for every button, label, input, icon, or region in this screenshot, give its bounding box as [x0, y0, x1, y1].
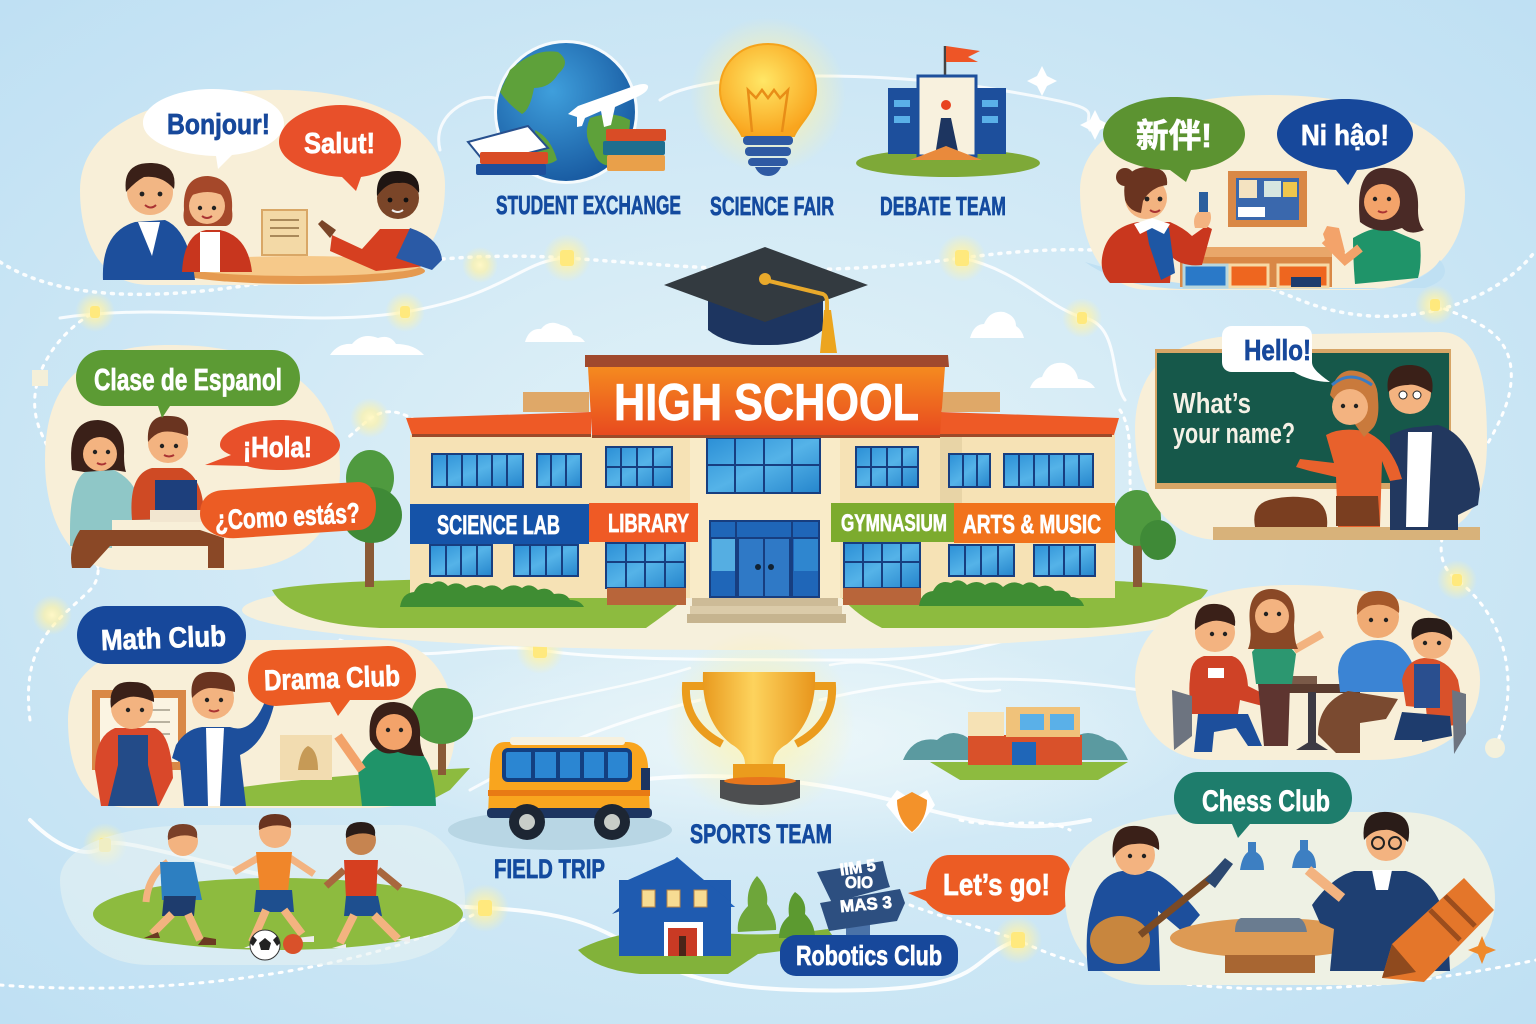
panel background	[60, 825, 465, 965]
pill: Robotics Club: Robotics Club	[796, 940, 942, 971]
banner: Arts & Music	[954, 503, 1115, 543]
trophy handles	[686, 686, 832, 744]
books right	[603, 129, 666, 171]
banner: Gymnasium: GYMNASIUM	[841, 510, 947, 537]
speech bubble: Hello	[1222, 326, 1330, 382]
speech bubble: Let's go: Let’s go!	[943, 867, 1050, 902]
books left	[468, 126, 548, 175]
brick planters	[607, 588, 921, 605]
pale light band below the school	[360, 630, 1200, 850]
bus stripes and bumper	[487, 768, 652, 818]
speech bubble: green greeting: 新伴!	[1136, 117, 1212, 154]
person: woman with guitar	[1087, 826, 1233, 971]
ground and lawn	[242, 570, 1218, 650]
speech bubble: Ni hao	[1277, 99, 1413, 185]
icon: orange shield	[886, 790, 935, 833]
ground	[856, 149, 1040, 177]
school name sign: HIGH SCHOOL	[614, 374, 919, 432]
pill: Math Club	[77, 606, 246, 664]
speech bubble: Bonjour	[143, 89, 284, 169]
bus wheels	[509, 804, 630, 840]
illustration: blue house	[578, 856, 958, 976]
player: center	[234, 814, 314, 948]
table with board	[1170, 918, 1370, 973]
upper windows	[432, 438, 1093, 493]
tree	[411, 688, 473, 775]
person: man in blue jacket	[103, 163, 195, 280]
label: Debate Team: DEBATE TEAM	[880, 191, 1006, 221]
label: Sports Team: SPORTS TEAM	[690, 819, 832, 849]
illustration: small school	[903, 707, 1128, 780]
table with document	[175, 210, 425, 284]
panel: Bonjour conversation	[80, 89, 445, 285]
soccer ball	[250, 930, 280, 960]
bus windows	[504, 750, 630, 780]
whiteboard	[92, 690, 186, 770]
entrance steps	[687, 598, 846, 623]
panel background	[45, 345, 340, 570]
pill: Clase de Espanol	[76, 350, 300, 418]
trophy base	[720, 764, 800, 805]
speech bubble: Let's go	[908, 855, 1072, 915]
bulletin board	[1228, 171, 1307, 227]
speech bubble: Drama Club: Drama Club	[263, 661, 400, 697]
player: right	[326, 822, 410, 948]
desk	[71, 510, 224, 568]
signpost: IIM 5	[839, 856, 877, 879]
label: Student Exchange: STUDENT EXCHANGE	[496, 190, 681, 220]
chalk text: What's: What’s	[1173, 388, 1251, 420]
icon: graduation cap	[664, 247, 868, 353]
speech bubble: Salut	[279, 105, 401, 191]
person: teacher with glasses	[1308, 812, 1450, 971]
trophy glow	[665, 630, 855, 820]
label: Field Trip: FIELD TRIP	[494, 854, 605, 884]
clouds	[330, 312, 1095, 388]
person: teacher in blue jacket	[172, 672, 274, 806]
signpost: OIO	[845, 873, 873, 892]
person: woman in green	[1323, 168, 1424, 284]
panel: chess club	[1065, 772, 1496, 985]
panel background	[80, 90, 445, 285]
blackboard	[1155, 349, 1451, 489]
speech bubble: Salut: Salut!	[304, 128, 375, 160]
tree left	[342, 450, 402, 587]
bells	[1240, 840, 1316, 870]
panel background	[68, 640, 455, 808]
green field	[93, 878, 463, 950]
person: woman teacher	[1296, 370, 1402, 527]
pill: Robotics Club	[780, 935, 958, 976]
trophy cup	[703, 672, 815, 764]
banner: Gymnasium	[831, 503, 954, 542]
pill: Clase de Espanol: Clase de Espanol	[94, 362, 282, 397]
desk and bag	[1213, 497, 1480, 540]
roofs	[406, 412, 1119, 437]
person: man in blue	[1318, 591, 1416, 753]
chalk text: your name: your name?	[1173, 418, 1295, 450]
speech bubble: Drama Club	[248, 646, 416, 716]
person: man in navy jacket	[1388, 365, 1480, 530]
trees	[738, 876, 815, 938]
speech bubble: Hola	[205, 420, 340, 470]
rear blocks	[523, 392, 1000, 412]
person: woman in green	[338, 702, 436, 806]
walls	[410, 435, 1115, 598]
panel background	[1065, 812, 1495, 985]
bulb glow	[690, 17, 846, 173]
signpost	[817, 856, 905, 937]
school name sign	[585, 355, 949, 438]
cabinet	[1180, 247, 1332, 287]
mortarboard	[664, 247, 868, 322]
cap skull	[708, 298, 823, 345]
speech bubble: Como estas: ¿Como estás?	[214, 497, 361, 536]
shrubs and lawn	[903, 733, 1128, 780]
icon: globe with plane and books	[468, 40, 666, 184]
person: woman in red jacket	[182, 176, 252, 272]
speech bubble: Chess Club: Chess Club	[1202, 785, 1330, 818]
banner: Science Lab	[410, 504, 589, 544]
pill: Math Club: Math Club	[100, 621, 226, 657]
person: boy in overalls	[95, 682, 173, 806]
person: woman in teal	[70, 420, 160, 548]
bus shadow	[448, 810, 672, 850]
person: boy in red	[1172, 604, 1276, 752]
icon: crayon	[1382, 878, 1494, 982]
bulb base	[743, 136, 793, 176]
flag	[945, 46, 980, 78]
lower windows	[430, 543, 1095, 588]
speech bubble: Como estas	[200, 482, 376, 538]
speech bubble: Chess Club	[1174, 772, 1352, 838]
speech bubble: Hola: ¡Hola!	[243, 432, 312, 464]
icon: trophy	[665, 630, 855, 820]
banner: Arts & Music: ARTS & MUSIC	[963, 509, 1101, 539]
bus body	[488, 742, 650, 816]
person: boy in red shirt	[318, 171, 442, 271]
player: left	[144, 824, 216, 945]
panel: clubs with teacher	[68, 606, 473, 808]
panel: club discussion	[1135, 585, 1480, 760]
panel background	[1135, 332, 1487, 540]
table	[1262, 676, 1360, 750]
green ground	[235, 768, 470, 806]
house	[612, 857, 735, 956]
bushes	[400, 580, 1084, 607]
panel: Spanish class	[45, 345, 376, 570]
label: Science Fair: SCIENCE FAIR	[710, 191, 834, 221]
icon: debate building	[856, 46, 1040, 177]
person: girl in green	[1248, 589, 1322, 746]
lawn	[578, 929, 838, 974]
school block	[968, 707, 1082, 765]
plane	[568, 84, 648, 127]
person: man in red and blue	[131, 416, 204, 520]
banner: Library	[589, 503, 698, 542]
speech bubble: Bonjour: Bonjour!	[167, 109, 270, 141]
person: boy in orange vest	[1394, 618, 1466, 754]
illustration: high school building	[242, 355, 1218, 650]
signpost: MAS 3	[839, 893, 893, 916]
building body	[888, 76, 1006, 160]
panel: Hello blackboard	[1135, 326, 1487, 540]
tassel	[759, 273, 837, 353]
icon: light bulb	[690, 17, 846, 176]
bulb glass	[720, 44, 816, 136]
banner: Library: LIBRARY	[608, 508, 689, 538]
entrance door	[710, 521, 819, 597]
panel background	[1135, 585, 1480, 760]
speech bubble: Ni hao: Ni hậo!	[1301, 120, 1389, 152]
banner: Science Lab: SCIENCE LAB	[437, 510, 560, 540]
panel: Ni hao conversation	[1080, 95, 1465, 290]
globe	[494, 40, 638, 184]
speech bubble: green greeting	[1103, 97, 1245, 182]
icon: school bus	[448, 737, 672, 850]
panel: soccer field	[60, 814, 465, 965]
person: woman with card	[1102, 167, 1212, 283]
bell on stand	[280, 735, 332, 780]
icon: orange sparkle	[1468, 936, 1496, 964]
small orange ball	[283, 934, 303, 954]
tree right	[1113, 490, 1176, 587]
panel background	[1080, 95, 1465, 290]
speech bubble: Hello: Hello!	[1244, 335, 1311, 367]
